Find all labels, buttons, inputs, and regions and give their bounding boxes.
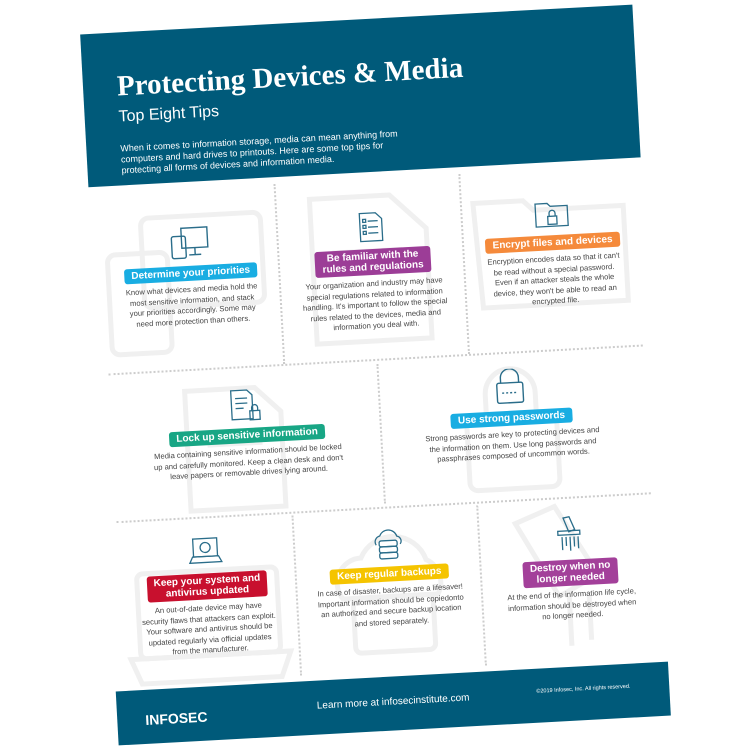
footer [116,662,671,745]
tip 6: An out-of-date device may have security flaws that attackers can exploit. Your software and antivirus should be updated regularly via official updates from the manufacturer. [142,600,276,656]
tip 8 [507,504,637,646]
label [315,246,431,278]
icon: locked document [230,389,261,420]
label: Keep regular backups [337,566,442,582]
intro text: When it comes to information storage, media can mean anything from computers and hard drives to printouts. Here are some top tips for protecting all forms of devices and information media. [120,128,398,175]
tip 1 [105,210,267,357]
label: rules and regulations [322,259,424,276]
label [330,563,449,585]
label [451,407,572,429]
icon: laptop update [188,537,223,564]
label: Determine your priorities [131,265,250,282]
tip 4: Media containing sensitive information should be locked up and carefully monitored. Keep a clean desk and don't leave papers or removable drives lying around. [154,442,343,481]
tip 1: Know what devices and media hold the most sensitive information, and stack your priorities accordingly. Some may need more protection than others. [126,281,258,328]
label [523,557,618,588]
label: Encrypt files and devices [492,234,613,251]
tip 6 [128,537,294,686]
tip 3 [470,198,631,310]
icon: cloud backup [374,529,402,560]
label: Use strong passwords [458,410,565,427]
label: longer needed [536,571,605,586]
label: Destroy when no [530,560,611,575]
label: Be familiar with the [326,249,419,264]
footer link: Learn more at infosecinstitute.com [317,692,470,712]
icon: padlock [496,368,524,404]
logo: INFOSEC [145,709,208,728]
icon: locked folder [534,202,569,228]
label: antivirus updated [166,584,249,600]
header [80,5,641,187]
tip 2: Your organization and industry may have special regulations related to information handling. It's important to follow the special rules related to the devices, media and information you deal with. [303,275,448,332]
tip 5: Strong passwords are key to protecting devices and the information on them. Use long passwords and passphrases composed of uncommon words. [425,425,600,464]
icon: shredder [557,516,581,551]
tip 4 [154,385,344,514]
title: Protecting Devices & Media [116,52,464,103]
icon: devices [170,226,209,260]
tip 2 [303,192,448,346]
icon: checklist [358,212,384,242]
tip 7 [317,529,464,656]
subtitle: Top Eight Tips [118,103,219,125]
label [146,570,268,603]
label: Lock up sensitive information [176,426,318,445]
tip 3: Encryption encodes data so that it can't be read without a special password. Even if an attacker steals the whole device, they won't be able to read an encrypted file. [487,251,620,306]
tip 8: At the end of the information life cycle, information should be destroyed when no longer needed. [507,586,637,621]
tip 5 [425,366,600,493]
tip 7: In case of disaster, backups are a lifesaver! Important information should be copiedonto an authorized and secure backup location and stored separately. [317,582,464,628]
copyright: ©2019 Infosec, Inc. All rights reserved. [536,684,631,695]
label: Keep your system and [153,573,260,589]
